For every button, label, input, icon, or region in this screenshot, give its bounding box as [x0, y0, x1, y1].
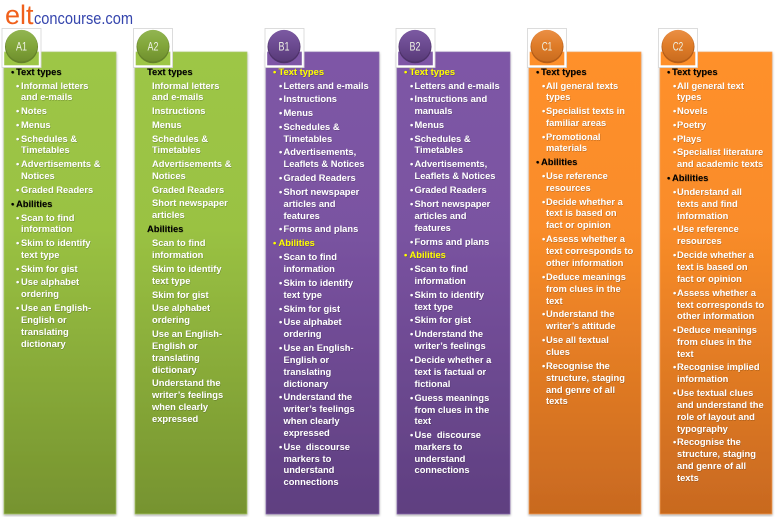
list: B2 text types: Instructions and: [414, 94, 487, 104]
list: C1 abilities: •: [542, 197, 545, 207]
list: B1 abilities: Use an English-: [284, 343, 354, 353]
list: C2 text types: Novels: [677, 106, 708, 116]
list: B1 text types: •: [279, 173, 282, 183]
list: B2 text types: manuals: [414, 106, 452, 116]
text list: B2: [404, 67, 500, 475]
heading: Abilities: •: [667, 173, 670, 183]
list: A2 abilities: information: [152, 250, 204, 260]
list: B1 abilities: Understand the: [284, 392, 352, 402]
list: B2 text types: •: [410, 81, 413, 91]
text list: A1: [11, 67, 101, 349]
list: B2 abilities: markers to: [414, 442, 463, 452]
list: B2 abilities: information: [414, 276, 466, 286]
list: A1 abilities: Scan to find: [21, 213, 75, 223]
list: C2 abilities: •: [673, 362, 676, 372]
list: C1 text types: materials: [546, 143, 587, 153]
list: B2 abilities: Skim to identify: [414, 290, 485, 300]
badge: C1: C1: [542, 42, 552, 54]
list: B1 text types: Letters and e-mails: [284, 81, 369, 91]
list: C2 abilities: Recognise the: [677, 437, 741, 447]
list: A2 abilities: Skim to identify: [152, 264, 222, 274]
badge: A2: [134, 28, 172, 68]
list: A1 text types: •: [16, 159, 19, 169]
heading: Abilities: •: [404, 250, 407, 260]
list: B2 abilities: writer’s feelings: [414, 341, 486, 351]
panel: C2: [658, 28, 772, 514]
list: C2 abilities: Use reference: [677, 224, 739, 234]
list: C2 text types: and academic texts: [677, 159, 763, 169]
list: C2 text types: Plays: [677, 134, 701, 144]
list: A2 abilities: dictionary: [152, 365, 197, 375]
list: A2 abilities: Use an English-: [152, 329, 222, 339]
heading: Abilities: •: [11, 199, 14, 209]
list: A2 text types: Short newspaper: [152, 198, 228, 208]
badge: B1: B1: [278, 42, 290, 54]
list: B2 text types: •: [410, 94, 413, 104]
list: B2 text types: Timetables: [414, 145, 463, 155]
list: A2 abilities: Scan to find: [152, 238, 206, 248]
list: B1 abilities: connections: [284, 477, 339, 487]
logo: eltconcourse.com: elt: [5, 0, 34, 30]
list: C2 abilities: role of layout and: [677, 412, 755, 422]
list: C2 abilities: •: [673, 250, 676, 260]
list: A1 abilities: •: [16, 303, 19, 313]
list: B1 text types: Forms and plans: [284, 224, 358, 234]
heading: Text types: Text types: [278, 67, 324, 77]
list: A1 abilities: information: [21, 224, 73, 234]
list: B1 abilities: •: [279, 252, 282, 262]
list: B2 text types: Short newspaper: [414, 199, 491, 209]
list: C1 abilities: other information: [546, 258, 624, 268]
list: A2 abilities: Use alphabet: [152, 303, 210, 313]
list: B2 abilities: from clues in the: [414, 405, 489, 415]
list: A2 text types: Graded Readers: [152, 185, 224, 195]
list: B2 abilities: •: [410, 290, 413, 300]
list: C1 abilities: writer’s attitude: [545, 321, 616, 331]
list: C1 abilities: Understand the: [546, 309, 615, 319]
heading: Abilities: Abilities: [16, 199, 52, 209]
list: B2 abilities: text: [414, 416, 431, 426]
list: B1 abilities: Scan to find: [284, 252, 337, 262]
list: C2 abilities: •: [673, 224, 676, 234]
list: C2 abilities: •: [673, 288, 676, 298]
list: A1 text types: •: [16, 185, 19, 195]
list: C2 text types: types: [677, 92, 701, 102]
list: B2 text types: features: [414, 223, 451, 233]
list: A2 text types: articles: [152, 210, 185, 220]
list: B1 text types: Leaflets & Notices: [284, 159, 365, 169]
list: B2 abilities: •: [410, 329, 413, 339]
list: C1 text types: types: [546, 92, 570, 102]
list: C1 abilities: text is based on: [546, 208, 617, 218]
list: C1 text types: familiar areas: [546, 118, 606, 128]
list: C2 abilities: [673, 187, 765, 483]
list: B2 text types: articles and: [414, 211, 467, 221]
badge: C2: [658, 28, 698, 68]
list: B2 abilities: connections: [414, 465, 470, 475]
list: B1 abilities: writer’s feelings: [282, 404, 355, 414]
list: B2 abilities: •: [410, 393, 413, 403]
list: A2 abilities: English or: [152, 341, 198, 351]
list: A2 abilities: when clearly: [151, 402, 209, 412]
panel: A1: [2, 28, 116, 514]
list: B1 text types: •: [279, 224, 282, 234]
list: C2 abilities: Deduce meanings: [677, 325, 757, 335]
list: C2 text types: All general text: [677, 81, 744, 91]
list: B1 text types: Short newspaper: [284, 187, 360, 197]
heading: Text types: •: [404, 67, 407, 77]
list: A2 text types: Notices: [152, 171, 186, 181]
list: B2 text types: [410, 81, 500, 247]
list: C1 text types: Promotional: [546, 132, 601, 142]
list: B1 text types: •: [279, 147, 282, 157]
list: C2 abilities: texts: [677, 473, 699, 483]
list: C2 abilities: from clues in the: [677, 337, 752, 347]
list: A1 text types: Graded Readers: [21, 185, 93, 195]
panel: A2: [134, 28, 247, 514]
heading: Text types: •: [667, 67, 670, 77]
badge: B2: [396, 28, 435, 68]
list: A2 abilities: writer’s feelings: [151, 390, 223, 400]
list: B1 text types: •: [279, 122, 282, 132]
list: C1 abilities: and genre of all: [546, 385, 615, 395]
badge: C2: C2: [673, 42, 683, 54]
list: C1 abilities: resources: [546, 183, 591, 193]
list: B1 abilities: translating: [284, 367, 332, 377]
list: B1 abilities: Use discourse: [284, 442, 350, 452]
list: B1 abilities: understand: [284, 465, 335, 475]
heading: Text types: Text types: [672, 67, 718, 77]
list: C2 abilities: Recognise implied: [677, 362, 760, 372]
list: B1 abilities: •: [279, 278, 282, 288]
list: C2 abilities: other information: [677, 311, 755, 321]
list: B2 abilities: text type: [414, 302, 453, 312]
list: A1 abilities: dictionary: [21, 339, 66, 349]
list: B2 abilities: Understand the: [414, 329, 483, 339]
list: B1 abilities: text type: [284, 290, 322, 300]
list: A2 abilities: translating: [152, 353, 200, 363]
list: C1 abilities: •: [542, 171, 545, 181]
list: B1 text types: •: [279, 187, 282, 197]
list: A2 text types: [152, 81, 232, 220]
heading: Abilities: Abilities: [278, 238, 315, 248]
list: C2 abilities: resources: [677, 236, 722, 246]
list: C2 abilities: fact or opinion: [677, 274, 742, 284]
list: A1 text types: •: [16, 81, 19, 91]
list: A2 abilities: ordering: [152, 315, 190, 325]
panel: B2: [396, 28, 510, 514]
list: A2 abilities: expressed: [152, 414, 199, 424]
list: A1 text types: Notes: [21, 106, 47, 116]
list: A1 abilities: •: [16, 213, 19, 223]
list: B1 abilities: markers to: [284, 454, 332, 464]
list: C2 abilities: structure, staging: [677, 449, 756, 459]
list: C1 abilities: Deduce meanings: [546, 272, 626, 282]
logo: eltconcourse.com: concourse.com: [34, 10, 133, 28]
list: A2 text types: Timetables: [152, 145, 201, 155]
list: B2 abilities: fictional: [414, 379, 450, 389]
list: B2 abilities: •: [410, 355, 413, 365]
list: B2 abilities: [410, 264, 492, 475]
list: C1 abilities: texts: [546, 396, 568, 406]
list: A2 text types: Menus: [152, 120, 182, 130]
list: C2 text types: Poetry: [677, 120, 707, 130]
list: B2 abilities: Guess meanings: [414, 393, 489, 403]
heading: Abilities: •: [536, 157, 539, 167]
list: B2 text types: •: [410, 159, 413, 169]
list: C1 abilities: [542, 171, 634, 406]
list: B2 text types: •: [410, 199, 413, 209]
list: B1 abilities: •: [279, 317, 282, 327]
heading: Text types: Text types: [410, 67, 455, 77]
list: B1 text types: features: [284, 211, 320, 221]
list: C1 abilities: •: [542, 335, 545, 345]
list: C2 text types: [673, 81, 763, 169]
list: C1 text types: •: [542, 106, 545, 116]
list: C2 abilities: •: [673, 325, 676, 335]
list: B2 abilities: Skim for gist: [414, 315, 471, 325]
heading: Text types: •: [11, 67, 14, 77]
list: B2 text types: •: [410, 237, 413, 247]
list: C2 abilities: •: [673, 437, 676, 447]
list: B2 text types: Schedules &: [414, 134, 471, 144]
list: B2 text types: Letters and e-mails: [414, 81, 500, 91]
list: B1 abilities: dictionary: [284, 379, 329, 389]
list: B1 text types: Timetables: [284, 134, 332, 144]
list: A2 abilities: [151, 238, 223, 424]
list: C2 text types: •: [673, 120, 676, 130]
list: C2 abilities: and genre of all: [677, 461, 746, 471]
text list: A2: [147, 67, 232, 424]
heading: Text types: •: [536, 67, 539, 77]
list: A1 abilities: Skim for gist: [21, 264, 78, 274]
list: B1 abilities: •: [279, 392, 282, 402]
list: A1 text types: Schedules &: [21, 134, 77, 144]
list: A2 abilities: Skim for gist: [152, 290, 209, 300]
list: C1 abilities: structure, staging: [546, 373, 625, 383]
list: A2 text types: Instructions: [152, 106, 205, 116]
list: A1 text types: Notices: [21, 171, 55, 181]
list: B1 abilities: ordering: [284, 329, 322, 339]
list: C1 abilities: •: [542, 272, 545, 282]
heading: Text types: Text types: [16, 67, 62, 77]
list: C2 abilities: texts and find: [677, 199, 738, 209]
list: B2 abilities: Decide whether a: [414, 355, 492, 365]
list: A1 text types: •: [16, 134, 19, 144]
badge: B1: [265, 28, 304, 68]
list: B1 abilities: Skim for gist: [284, 304, 340, 314]
list: C2 text types: •: [673, 106, 676, 116]
list: B2 text types: Advertisements,: [414, 159, 487, 169]
list: C1 abilities: Use all textual: [546, 335, 609, 345]
heading: Text types: Text types: [541, 67, 587, 77]
list: A1 abilities: •: [16, 238, 19, 248]
list: A1 text types: •: [16, 106, 19, 116]
list: A1 text types: •: [16, 120, 19, 130]
list: B1 text types: •: [279, 94, 282, 104]
list: A2 text types: Schedules &: [152, 134, 208, 144]
list: A1 abilities: Use alphabet: [21, 277, 79, 287]
list: B2 text types: •: [410, 120, 413, 130]
list: C1 text types: All general texts: [546, 81, 618, 91]
list: B2 abilities: text is factual or: [414, 367, 487, 377]
badge: B2: B2: [410, 42, 420, 54]
list: B2 abilities: understand: [414, 454, 466, 464]
list: B1 abilities: •: [279, 304, 282, 314]
list: B1 abilities: [279, 252, 355, 487]
list: B1 abilities: information: [284, 264, 335, 274]
list: A1 text types: Advertisements &: [21, 159, 101, 169]
list: C2 text types: •: [673, 134, 676, 144]
list: B1 abilities: Skim to identify: [284, 278, 354, 288]
list: C1 text types: •: [542, 81, 545, 91]
heading: Abilities: Abilities: [672, 173, 708, 183]
list: C1 abilities: from clues in the: [546, 284, 621, 294]
list: C1 abilities: fact or opinion: [546, 220, 611, 230]
list: C2 abilities: text corresponds to: [677, 300, 765, 310]
list: C2 text types: Specialist literature: [677, 147, 763, 157]
list: B2 text types: •: [410, 134, 413, 144]
list: A1 text types: Informal letters: [21, 81, 89, 91]
heading: Abilities: Abilities: [147, 224, 183, 234]
panel: B1: [265, 28, 379, 514]
list: C1 abilities: Recognise the: [546, 361, 610, 371]
list: A1 text types: [16, 81, 101, 195]
list: B1 abilities: when clearly: [282, 416, 340, 426]
list: B1 text types: Instructions: [284, 94, 337, 104]
list: C2 abilities: information: [677, 374, 729, 384]
list: C2 abilities: text is based on: [677, 262, 748, 272]
list: B2 text types: Menus: [414, 120, 444, 130]
list: C2 abilities: Decide whether a: [677, 250, 755, 260]
text list: C1: [536, 67, 634, 406]
list: C2 text types: •: [673, 81, 676, 91]
list: A1 abilities: text type: [21, 250, 59, 260]
list: C1 text types: [542, 81, 625, 153]
list: C2 abilities: Understand all: [677, 187, 742, 197]
badge: A1: [2, 28, 41, 68]
list: B2 abilities: •: [410, 430, 413, 440]
list: C1 abilities: text: [546, 296, 563, 306]
list: C1 text types: Specialist texts in: [546, 106, 625, 116]
list: A1 text types: Menus: [21, 120, 51, 130]
list: B1 text types: •: [279, 108, 282, 118]
list: C2 abilities: •: [673, 388, 676, 398]
list: B1 abilities: •: [279, 442, 282, 452]
list: A2 text types: and e-mails: [152, 92, 203, 102]
list: A2 text types: Informal letters: [152, 81, 220, 91]
list: B2 abilities: Scan to find: [414, 264, 468, 274]
list: C1 abilities: •: [542, 234, 545, 244]
list: B1 abilities: English or: [284, 355, 330, 365]
badge: A2: A2: [148, 42, 158, 54]
list: A1 abilities: Use an English-: [21, 303, 91, 313]
list: A1 text types: Timetables: [21, 145, 70, 155]
heading: Abilities: Abilities: [410, 250, 446, 260]
list: B2 text types: Forms and plans: [414, 237, 489, 247]
text list: C2: [667, 67, 765, 483]
list: C2 abilities: text: [677, 349, 694, 359]
list: B2 abilities: Use discourse: [414, 430, 481, 440]
list: C1 abilities: Use reference: [546, 171, 608, 181]
panel: C1: [528, 28, 641, 514]
list: B1 abilities: expressed: [284, 428, 330, 438]
list: C1 abilities: text corresponds to: [546, 246, 634, 256]
list: B2 text types: Leaflets & Notices: [414, 171, 496, 181]
list: C1 text types: •: [542, 132, 545, 142]
list: B1 text types: Menus: [284, 108, 313, 118]
list: B1 abilities: Use alphabet: [284, 317, 342, 327]
badge: A1: A1: [16, 42, 27, 54]
list: B2 abilities: •: [410, 315, 413, 325]
heading: Abilities: Abilities: [541, 157, 577, 167]
list: B2 abilities: •: [410, 264, 413, 274]
heading: Text types: Text types: [147, 67, 193, 77]
list: C1 abilities: clues: [546, 347, 570, 357]
list: C1 abilities: Assess whether a: [546, 234, 626, 244]
list: B1 text types: [279, 81, 369, 234]
list: B1 abilities: •: [279, 343, 282, 353]
list: A2 abilities: Understand the: [152, 378, 221, 388]
list: B1 text types: Schedules &: [284, 122, 340, 132]
list: C1 abilities: •: [542, 309, 545, 319]
list: A1 abilities: English or: [21, 315, 67, 325]
list: A1 text types: and e-mails: [21, 92, 72, 102]
list: B1 text types: •: [279, 81, 282, 91]
list: A1 abilities: •: [16, 264, 19, 274]
list: B2 text types: •: [410, 185, 413, 195]
list: C2 text types: •: [673, 147, 676, 157]
list: B2 text types: Graded Readers: [414, 185, 487, 195]
list: C2 abilities: information: [677, 211, 729, 221]
heading: Abilities: •: [273, 238, 276, 248]
list: C2 abilities: Use textual clues: [677, 388, 753, 398]
list: C2 abilities: Assess whether a: [677, 288, 757, 298]
list: A2 abilities: text type: [152, 276, 190, 286]
list: C2 abilities: •: [673, 187, 676, 197]
text list: B1: [273, 67, 369, 487]
list: C1 abilities: Decide whether a: [546, 197, 624, 207]
list: C2 abilities: typography: [677, 424, 729, 434]
list: A2 text types: Advertisements &: [152, 159, 232, 169]
list: A1 abilities: [16, 213, 91, 349]
list: A1 abilities: ordering: [21, 289, 59, 299]
list: B1 text types: Advertisements,: [284, 147, 356, 157]
heading: Text types: •: [273, 67, 276, 77]
list: B1 text types: articles and: [284, 199, 336, 209]
logo: eltconcourse.com: [5, 0, 133, 30]
list: A1 abilities: Skim to identify: [21, 238, 91, 248]
badge: C1: [528, 28, 566, 68]
list: A1 abilities: translating: [21, 327, 69, 337]
list: A1 abilities: •: [16, 277, 19, 287]
list: C2 abilities: and understand the: [677, 400, 764, 410]
list: C1 abilities: •: [542, 361, 545, 371]
list: B1 text types: Graded Readers: [284, 173, 356, 183]
